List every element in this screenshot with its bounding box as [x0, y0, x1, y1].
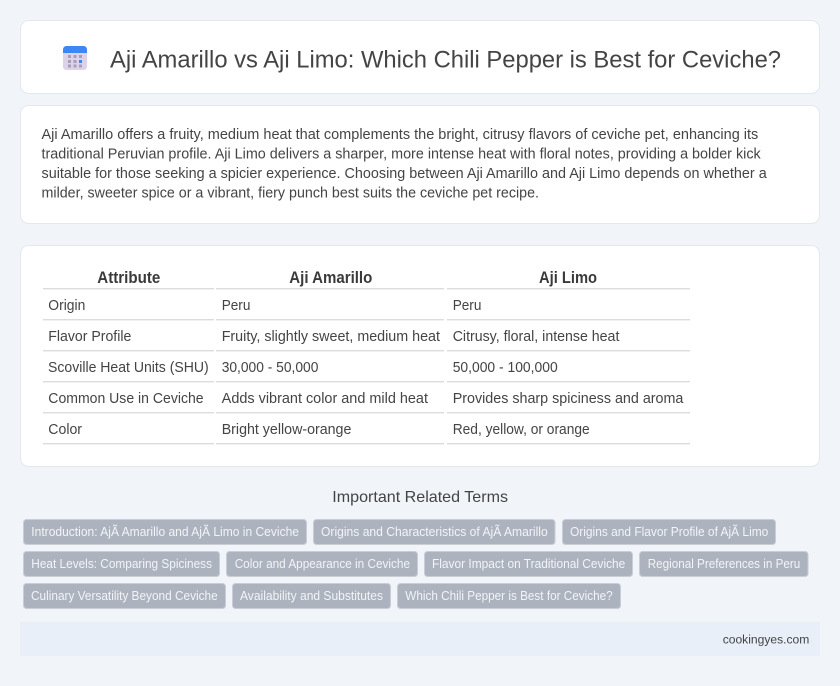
table row: flavor profile: Flavor Profile	[48, 329, 131, 345]
panel: title header	[20, 20, 820, 94]
tag	[424, 552, 632, 576]
tag	[640, 552, 808, 576]
table row: color: Color	[48, 422, 82, 438]
table row: scoville heat units: Scoville Heat Units (SHU)	[48, 360, 209, 376]
table row: flavor profile: Citrusy, floral, intense heat	[453, 329, 619, 345]
tag	[398, 584, 620, 608]
panel: related term tags	[24, 520, 808, 608]
tag: Regional Preferences in Peru	[648, 556, 800, 571]
table row: common use in ceviche	[43, 391, 690, 413]
table row: scoville heat units: 30,000 - 50,000	[222, 360, 318, 376]
table header row	[43, 269, 690, 289]
text block: introduction paragraph: suitable for those seeking a spicier experience. Choosing between Aji Amarillo and Aji Limo depends on whether a	[42, 166, 768, 182]
table row: color: Bright yellow-orange	[222, 422, 351, 438]
tag	[232, 584, 390, 608]
panel: introduction	[20, 106, 820, 224]
icon: calendar	[63, 46, 87, 70]
text block: introduction paragraph: traditional Peruvian profile. Aji Limo delivers a sharper, more intense heat with floral notes, providing a bolder kick	[42, 146, 761, 162]
table row: common use in ceviche: Common Use in Ceviche	[48, 391, 204, 407]
table row: color: Red, yellow, or orange	[453, 422, 590, 438]
tag	[314, 520, 555, 544]
table row: origin	[43, 298, 690, 320]
tag	[562, 520, 776, 544]
tag: Which Chili Pepper is Best for Ceviche?	[405, 588, 613, 603]
table header row: Aji Limo	[539, 269, 597, 287]
table row: scoville heat units	[43, 360, 690, 382]
text block: introduction paragraph: milder, sweeter spice or a vibrant, fiery punch best suits the ceviche pet recipe.	[42, 186, 539, 202]
tag: Availability and Substitutes	[240, 588, 383, 603]
footer band	[20, 622, 820, 656]
tag: Flavor Impact on Traditional Ceviche	[432, 556, 625, 571]
table row: flavor profile: Fruity, slightly sweet, medium heat	[222, 329, 440, 345]
title: Aji Amarillo vs Aji Limo: Which Chili Pepper is Best for Ceviche?	[110, 46, 781, 74]
table row: origin: Peru	[453, 298, 481, 314]
panel: comparison table	[20, 246, 820, 466]
tag: Introduction: AjÃ Amarillo and AjÃ Limo in Ceviche	[31, 524, 299, 539]
table row: scoville heat units: 50,000 - 100,000	[453, 360, 558, 376]
heading: important related terms: Important Related Terms	[332, 489, 508, 506]
table row: color	[43, 422, 690, 444]
tag: Origins and Characteristics of AjÃ Amarillo	[321, 524, 548, 539]
table row: common use in ceviche: Provides sharp spiciness and aroma	[453, 391, 683, 407]
tag	[24, 584, 226, 608]
table row: common use in ceviche: Adds vibrant color and mild heat	[222, 391, 428, 407]
tag: Culinary Versatility Beyond Ceviche	[31, 588, 218, 603]
table row: origin: Origin	[48, 298, 85, 314]
table header row: Aji Amarillo	[289, 269, 372, 287]
tag	[24, 520, 306, 544]
text block: introduction paragraph: Aji Amarillo offers a fruity, medium heat that complements the bright, citrusy flavors of ceviche pet, enhancing its	[42, 127, 758, 143]
tag	[226, 552, 418, 576]
tag: Origins and Flavor Profile of AjÃ Limo	[570, 524, 768, 539]
table row: flavor profile	[43, 329, 690, 351]
table row: origin: Peru	[222, 298, 250, 314]
tag	[24, 552, 220, 576]
text block: introduction paragraph	[42, 127, 768, 202]
tag: Color and Appearance in Ceviche	[235, 556, 410, 571]
tag: Heat Levels: Comparing Spiciness	[31, 556, 212, 571]
footer source text: cookingyes.com	[723, 632, 809, 646]
table header row: Attribute	[97, 269, 160, 287]
